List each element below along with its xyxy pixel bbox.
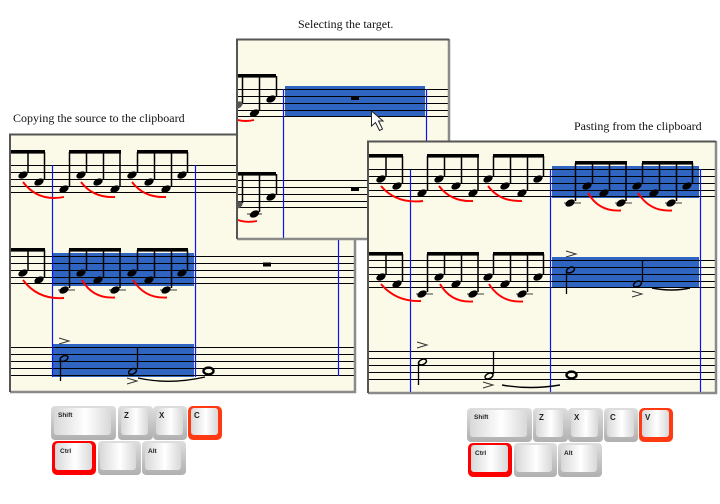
target rest 2 bbox=[351, 188, 359, 191]
key: C highlighted: C bbox=[194, 411, 200, 420]
target staff 2 notes bbox=[232, 172, 277, 222]
key: Shift: Shift bbox=[58, 412, 73, 419]
barlines bbox=[410, 169, 700, 393]
key: Z: Z bbox=[539, 413, 544, 422]
caption: pasting: Pasting from the clipboard bbox=[574, 119, 702, 133]
panel: source score bbox=[10, 134, 356, 392]
source panel frame bbox=[10, 134, 355, 392]
selection: target bbox=[285, 86, 425, 117]
caption: copying: Copying the source to the clipboard bbox=[13, 111, 185, 125]
target staff 1 notes bbox=[238, 74, 278, 122]
pasted panel frame bbox=[368, 141, 716, 393]
key: Z bbox=[533, 408, 568, 442]
pasted staff 1 notes bbox=[369, 154, 693, 211]
caption: selecting: Selecting the target. bbox=[298, 17, 393, 31]
key: Shift bbox=[467, 408, 532, 442]
key: Ctrl highlighted bbox=[52, 441, 96, 475]
pasted staff 2 notes bbox=[369, 251, 690, 302]
selection: second staff source bbox=[52, 253, 194, 286]
key: C bbox=[604, 408, 638, 442]
key: Ctrl highlighted: Ctrl bbox=[60, 448, 71, 455]
key: X: X bbox=[159, 411, 165, 420]
key: Shift: Shift bbox=[474, 414, 489, 421]
key: C: C bbox=[610, 413, 616, 422]
whole rest bbox=[263, 262, 271, 266]
keyboard: copy shortcut bbox=[51, 406, 222, 475]
staff lines bbox=[238, 90, 449, 208]
key: C highlighted bbox=[188, 406, 222, 440]
key: Shift bbox=[51, 406, 116, 440]
key: V highlighted bbox=[639, 408, 673, 442]
target rest 1 bbox=[351, 97, 359, 100]
selection: pasted second staff bbox=[552, 257, 699, 288]
staff lines bbox=[369, 170, 716, 380]
target panel frame bbox=[237, 39, 449, 239]
key: Ctrl highlighted: Ctrl bbox=[475, 450, 486, 457]
key: Alt: Alt bbox=[148, 448, 158, 455]
selection: third staff source bbox=[52, 344, 194, 377]
barlines bbox=[284, 89, 426, 239]
key: blank bbox=[514, 443, 557, 477]
staff 1 notes bbox=[11, 150, 188, 198]
key: Alt bbox=[558, 443, 602, 477]
barlines bbox=[52, 165, 338, 377]
selection: pasted first staff bbox=[552, 166, 699, 198]
key: X bbox=[568, 408, 603, 442]
staff 2 notes bbox=[11, 248, 188, 298]
pasted staff 3 notes bbox=[417, 342, 576, 388]
key: V highlighted: V bbox=[645, 413, 651, 422]
keyboard: paste shortcut bbox=[467, 408, 673, 477]
panel: pasted score bbox=[368, 141, 716, 393]
key: Alt: Alt bbox=[564, 450, 574, 457]
key: Alt bbox=[142, 441, 186, 475]
key: blank bbox=[98, 441, 141, 475]
staff lines bbox=[11, 166, 355, 376]
key: X: X bbox=[574, 413, 580, 422]
key: Z: Z bbox=[124, 411, 129, 420]
staff 3 notes bbox=[59, 338, 214, 384]
panel: target score bbox=[232, 39, 449, 239]
icon: mouse cursor bbox=[372, 111, 383, 130]
key: Ctrl highlighted bbox=[468, 443, 512, 477]
key: Z bbox=[118, 406, 153, 440]
key: X bbox=[153, 406, 187, 440]
